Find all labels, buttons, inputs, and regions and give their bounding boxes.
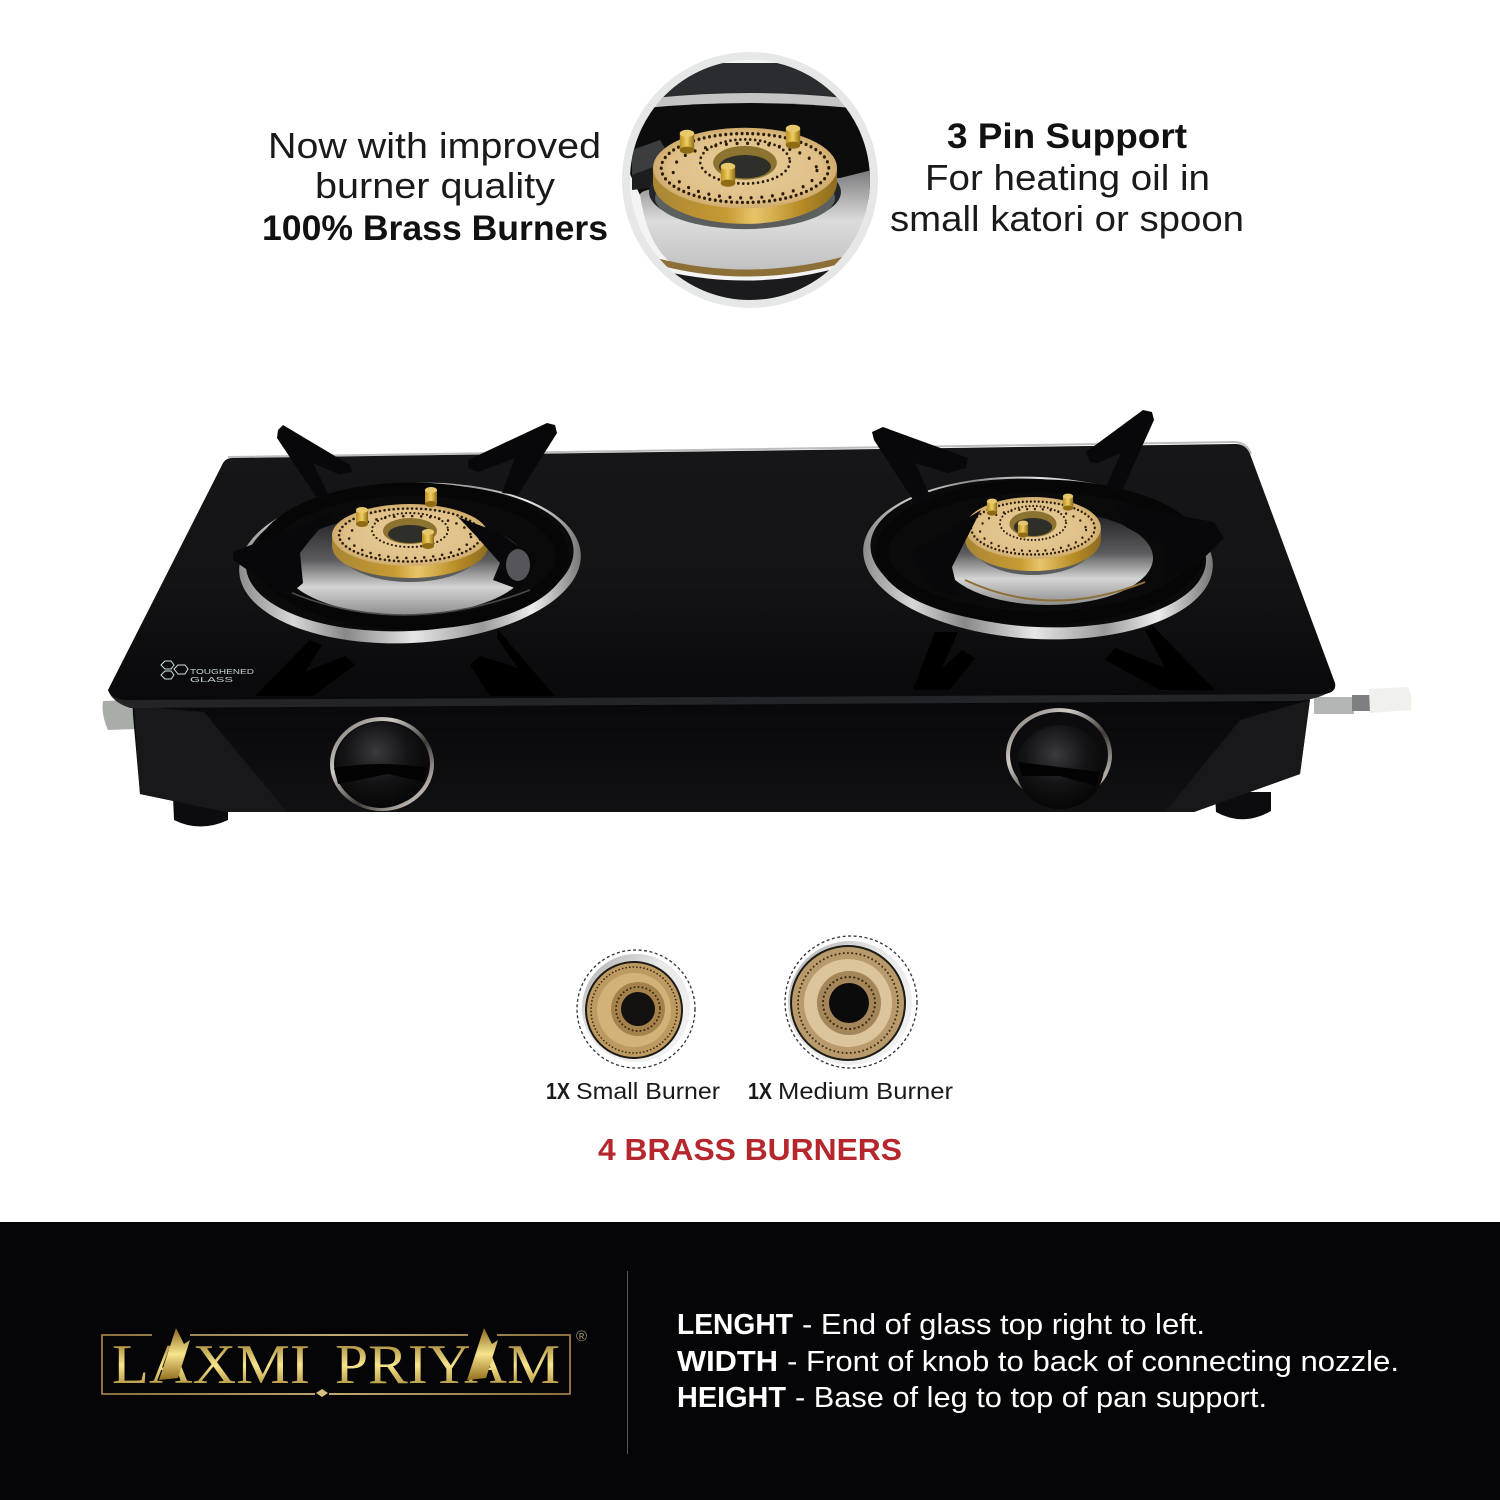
- height specification: - Base of leg to top of pan support.: [795, 1382, 1267, 1414]
- right control knob: [1008, 710, 1110, 809]
- logo: Laxmi Priyam: LAXMI: [112, 1334, 310, 1396]
- right burner assembly: [859, 410, 1224, 648]
- left feature text: burner quality: [315, 165, 555, 206]
- steel drip ring: [235, 474, 585, 652]
- left burner assembly: [233, 423, 585, 652]
- width specification: WIDTH: [677, 1346, 778, 1378]
- right feature text: [890, 117, 1244, 239]
- pan support ring: [882, 486, 1198, 618]
- vertical divider: [627, 1271, 628, 1454]
- steel drip ring: [859, 468, 1217, 648]
- height specification: HEIGHT: [677, 1382, 786, 1414]
- steel bowl: [283, 515, 527, 615]
- brass burners heading: 4 BRASS BURNERS: [598, 1132, 902, 1167]
- bowl gold reflection: [965, 580, 1145, 601]
- toughened glass mark: GLASS: [190, 675, 233, 684]
- pan support arms: [233, 423, 557, 597]
- cast arm highlight: [506, 549, 530, 581]
- burner icon: medium: [785, 936, 917, 1068]
- right feature text: For heating oil in: [925, 157, 1210, 198]
- medium burner label: Medium Burner: [778, 1078, 953, 1104]
- brass burner: [332, 504, 488, 582]
- small burner label: 1X: [546, 1078, 571, 1104]
- logo: Laxmi Priyam: [102, 1328, 587, 1397]
- left feature text: 100% Brass Burners: [262, 209, 608, 248]
- ring glints: [285, 590, 530, 615]
- glass cooktop: [108, 444, 1335, 700]
- length specification: - End of glass top right to left.: [802, 1309, 1205, 1341]
- stove feet: [173, 792, 1271, 826]
- brass burner: [965, 497, 1101, 575]
- stove body: [132, 698, 1310, 812]
- glass top highlight: [228, 442, 1251, 457]
- burner pins: [987, 494, 1073, 538]
- steel bowl: [943, 511, 1153, 605]
- body side facets: [134, 700, 1310, 812]
- medium burner label: 1X: [748, 1078, 773, 1104]
- logo flame accents: [159, 1328, 498, 1380]
- pan support reflections: [255, 625, 1215, 696]
- right feature text: small katori or spoon: [890, 198, 1244, 239]
- right feature text: 3 Pin Support: [947, 117, 1187, 156]
- right gas nozzle: [1314, 687, 1412, 714]
- burner pins: [356, 487, 437, 549]
- burner icon: small: [577, 950, 695, 1068]
- left feature text: [262, 125, 608, 248]
- pan support ring: [262, 489, 562, 623]
- toughened glass mark: [161, 661, 255, 684]
- pan support arms: [872, 410, 1224, 597]
- left control knob: [332, 719, 432, 809]
- left feature text: Now with improved: [268, 125, 601, 166]
- gas stove product: [103, 410, 1412, 826]
- glass top edge: [108, 683, 1335, 708]
- footer panel: [0, 1222, 1500, 1500]
- logo: Laxmi Priyam: ®: [576, 1328, 587, 1345]
- callout: brass burner close-up: [622, 52, 878, 308]
- small burner label: Small Burner: [576, 1078, 720, 1104]
- logo: Laxmi Priyam: PRIYAM: [335, 1334, 560, 1396]
- left gas inlet stub: [103, 700, 136, 730]
- length specification: LENGHT: [677, 1309, 793, 1341]
- toughened glass mark: TOUGHENED: [190, 667, 255, 676]
- width specification: - Front of knob to back of connecting nozzle.: [787, 1346, 1399, 1378]
